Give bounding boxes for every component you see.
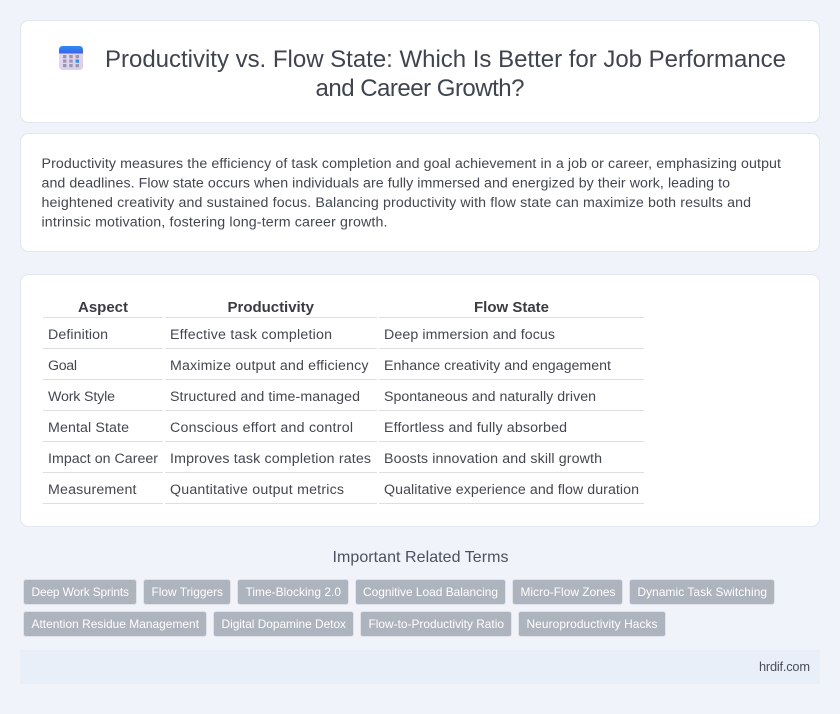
text block: summary: Productivity measures the efficiency of task completion and goal achievement in a job or career, emphasizing output [42, 156, 781, 172]
panel: comparison table [20, 274, 820, 526]
table row: definition: Effective task completion [170, 327, 332, 343]
table row: mental state: Conscious effort and control [170, 420, 353, 436]
table row: definition: Deep immersion and focus [384, 327, 555, 343]
table row: definition [48, 327, 555, 343]
tag group: related terms: Flow Triggers [152, 585, 223, 599]
table row: measurement: Quantitative output metrics [170, 482, 344, 498]
text block: summary [42, 156, 781, 230]
table row: impact on career: Boosts innovation and skill growth [384, 451, 602, 467]
text block: summary: heightened creativity and sustained focus. Balancing productivity with flow state can maximize both results and [42, 195, 751, 211]
tag group: related terms: Neuroproductivity Hacks [526, 617, 658, 631]
icon: calendar [59, 46, 83, 70]
table header: Productivity [228, 299, 315, 316]
table row: impact on career [48, 451, 602, 467]
text block: summary: intrinsic motivation, fostering long-term career growth. [42, 214, 388, 230]
table row: measurement: Qualitative experience and flow duration [384, 482, 639, 498]
table row: goal: Goal [48, 358, 77, 374]
tag group: related terms: Deep Work Sprints [32, 585, 129, 599]
heading: related terms: Important Related Terms [332, 549, 508, 566]
tag group: related terms: Flow-to-Productivity Ratio [368, 617, 504, 631]
table row: impact on career: Impact on Career [48, 451, 158, 467]
table row: mental state: Mental State [48, 420, 129, 436]
table row: mental state: Effortless and fully absorbed [384, 420, 567, 436]
tag group: related terms: Digital Dopamine Detox [222, 617, 346, 631]
tag group: related terms: Time-Blocking 2.0 [246, 585, 341, 599]
table row: work style: Work Style [48, 389, 115, 405]
table row: goal: Maximize output and efficiency [170, 358, 369, 374]
table row: work style: Spontaneous and naturally driven [384, 389, 596, 405]
tag group: related terms: Cognitive Load Balancing [363, 585, 498, 599]
title [105, 46, 786, 102]
tag group: related terms [24, 580, 774, 636]
tag group: related terms: Dynamic Task Switching [638, 585, 767, 599]
table row: measurement: Measurement [48, 482, 137, 498]
table row: mental state [48, 420, 567, 436]
footer: hrdif.com [759, 659, 810, 674]
table row: measurement [48, 482, 639, 498]
table row: goal: Enhance creativity and engagement [384, 358, 611, 374]
tag group: related terms: Micro-Flow Zones [520, 585, 616, 599]
table row: work style: Structured and time-managed [170, 389, 360, 405]
title: and Career Growth? [316, 75, 524, 102]
title: Productivity vs. Flow State: Which Is Better for Job Performance [105, 46, 786, 73]
table row: definition: Definition [48, 327, 108, 343]
panel: title card [20, 20, 820, 122]
panel: intro paragraph [20, 134, 820, 252]
table header [78, 299, 549, 316]
table header: Aspect [78, 299, 128, 316]
table row: goal [48, 358, 611, 374]
tag group: related terms: Attention Residue Management [32, 617, 200, 631]
table row: impact on career: Improves task completion rates [170, 451, 371, 467]
table header: Flow State [474, 299, 549, 316]
text block: summary: and deadlines. Flow state occurs when individuals are fully immersed and energized by their work, leading to [42, 176, 730, 192]
table row: work style [48, 389, 596, 405]
footer [20, 650, 820, 684]
